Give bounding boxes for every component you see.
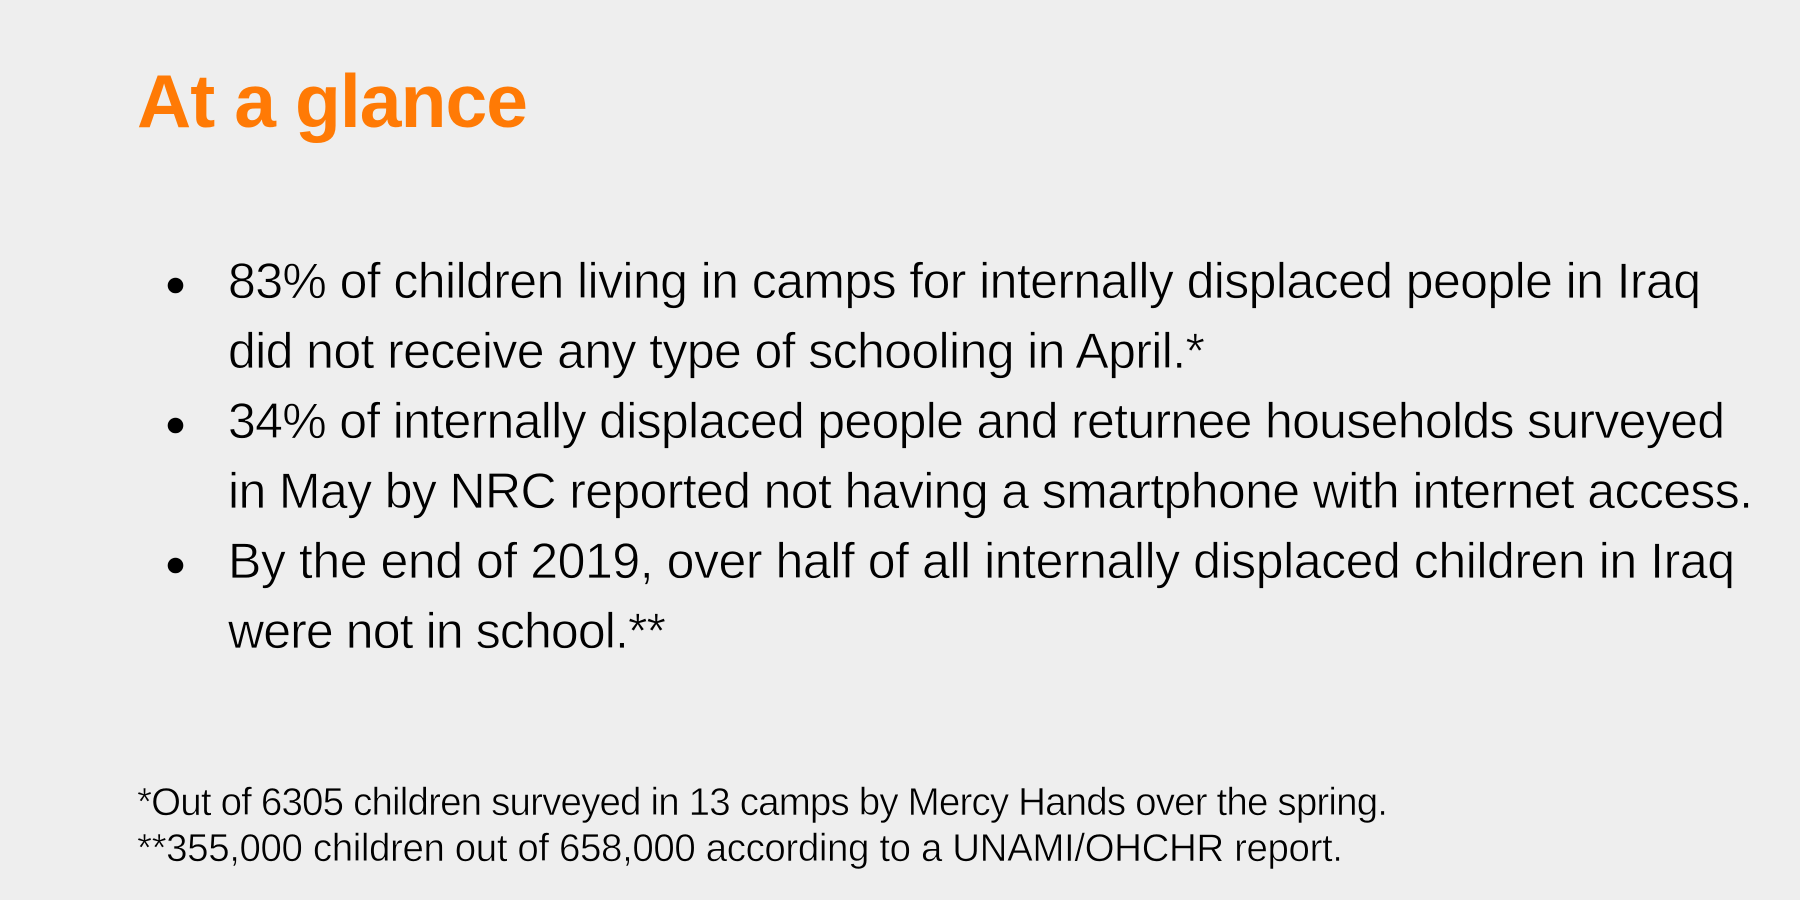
bullet list bbox=[168, 253, 1753, 659]
bullet item 3: were not in school.** bbox=[227, 603, 666, 659]
bullet item 2: 34% of internally displaced people and returnee households surveyed bbox=[228, 393, 1725, 449]
bullet item 2: in May by NRC reported not having a smartphone with internet access. bbox=[228, 463, 1753, 519]
bullet item 2 bbox=[168, 393, 1753, 519]
bullet item 1: did not receive any type of schooling in April.* bbox=[228, 323, 1205, 379]
footnotes bbox=[137, 781, 1388, 870]
bullet item 3: By the end of 2019, over half of all internally displaced children in Iraq bbox=[228, 533, 1735, 589]
bullet item 1: 83% of children living in camps for internally displaced people in Iraq bbox=[228, 253, 1701, 309]
bullet item 1 bbox=[168, 253, 1701, 379]
bullet item 3 bbox=[168, 533, 1735, 659]
footnotes: **355,000 children out of 658,000 according to a UNAMI/OHCHR report. bbox=[137, 827, 1343, 870]
footnotes: *Out of 6305 children surveyed in 13 camps by Mercy Hands over the spring. bbox=[137, 781, 1388, 824]
title: At a glance bbox=[137, 59, 528, 143]
